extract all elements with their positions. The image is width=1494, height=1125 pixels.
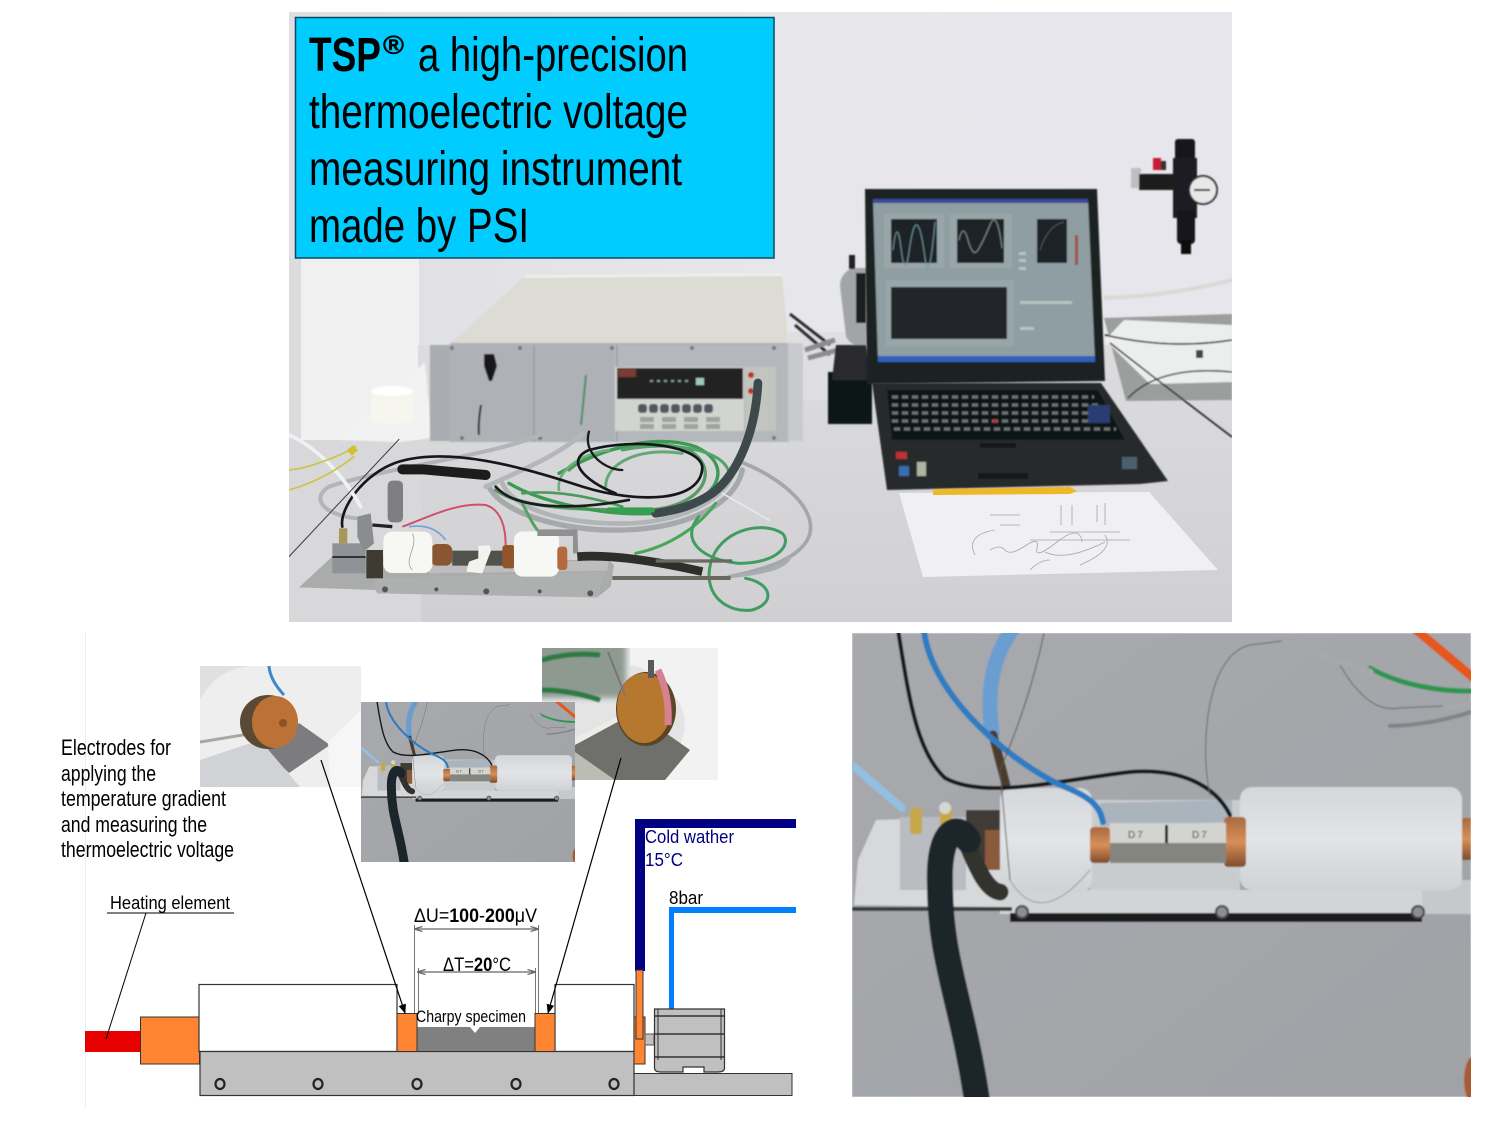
laptop with measurement software on screen <box>865 189 1168 490</box>
tray, papers and wires at right <box>790 280 1232 437</box>
panel: close-up photo of the test rig <box>852 628 1484 1104</box>
handwritten note under a yellow pencil <box>899 487 1218 577</box>
text block: electrodes description: thermoelectric voltage <box>61 837 234 862</box>
dimension: delta T <box>418 955 536 1013</box>
panel: centre overview inset photo <box>361 702 575 862</box>
label: Charpy specimen: Charpy specimen <box>416 1008 526 1026</box>
callout heading lines: a high-precision <box>418 29 688 82</box>
phone beside the laptop <box>828 255 872 424</box>
grey bench surface <box>852 633 1471 1097</box>
title callout box <box>296 18 774 258</box>
specimen with D7 markings: D7 <box>1128 830 1145 841</box>
thermoelectric test fixture on the desk <box>299 481 732 597</box>
Charpy specimen with notch <box>417 1027 535 1051</box>
pneumatic fittings and mechanism <box>900 802 1003 890</box>
water supply lines <box>635 819 796 1009</box>
aluminium base plate <box>852 800 1471 922</box>
specimen with D7 markings <box>1110 823 1226 863</box>
callout heading lines: measuring instrument <box>309 143 682 196</box>
fingertip at frame edge <box>1464 1056 1484 1104</box>
dimension: delta U <box>414 906 538 1013</box>
dimension: delta U: ΔU=100-200μV <box>414 906 537 927</box>
callout heading lines: TSP <box>309 29 381 82</box>
tubes and wires <box>852 628 1476 1100</box>
label: cold water <box>645 826 734 870</box>
laptop keyboard base <box>872 383 1168 490</box>
dimension: delta T: ΔT=20°C <box>443 955 511 976</box>
valve block <box>654 1009 724 1072</box>
copper electrodes <box>1090 827 1110 863</box>
cooling column <box>634 970 654 1064</box>
panel: right electrode inset photo <box>542 648 718 780</box>
text block: electrodes description: temperature gradient <box>61 786 226 811</box>
specimen with D7 markings: D7 <box>1192 830 1209 841</box>
white insulating cylinders <box>1000 788 1092 892</box>
text block: electrodes description <box>61 735 234 862</box>
label: 8bar: 8bar <box>669 888 703 908</box>
label: cold water: Cold wather <box>645 826 734 847</box>
arrow: right electrode leader <box>548 758 621 1013</box>
base rail with holes <box>200 1052 792 1096</box>
callout heading lines: made by PSI <box>309 200 529 253</box>
faint vertical page rule <box>85 632 86 1108</box>
text block: electrodes description: Electrodes for <box>61 735 171 760</box>
orange heater block <box>140 1017 200 1064</box>
panel: lab photo of the TSP instrument <box>289 12 1232 622</box>
text block: electrodes description: applying the <box>61 761 156 786</box>
arrow: left electrode leader <box>321 760 405 1013</box>
callout heading lines: thermoelectric voltage <box>309 86 688 139</box>
laptop lid and screen <box>865 189 1105 384</box>
fixture base plate <box>299 557 614 597</box>
panel: left electrode inset photo <box>200 666 361 787</box>
white cup and paper towel on the desk <box>340 362 432 442</box>
diagram: schematic section of the instrument <box>85 758 796 1096</box>
photo background: wall and desk <box>289 12 1232 622</box>
heating element bar <box>85 1031 141 1052</box>
white insulator blocks <box>199 984 397 1052</box>
base plate bolts <box>1016 906 1424 918</box>
bundled green, grey and black cables <box>289 383 811 610</box>
callout heading lines <box>309 29 688 253</box>
label: heating element with leader <box>106 892 234 1039</box>
label: cold water: 15°C <box>645 849 683 870</box>
copper electrodes <box>397 1014 417 1052</box>
rack instrument with digital multimeter <box>430 273 803 442</box>
label: heating element with leader: Heating element <box>110 892 230 913</box>
wall-mounted pressure regulator <box>1131 139 1218 254</box>
callout heading lines: ® <box>383 30 404 60</box>
text block: electrodes description: and measuring the <box>61 812 207 837</box>
